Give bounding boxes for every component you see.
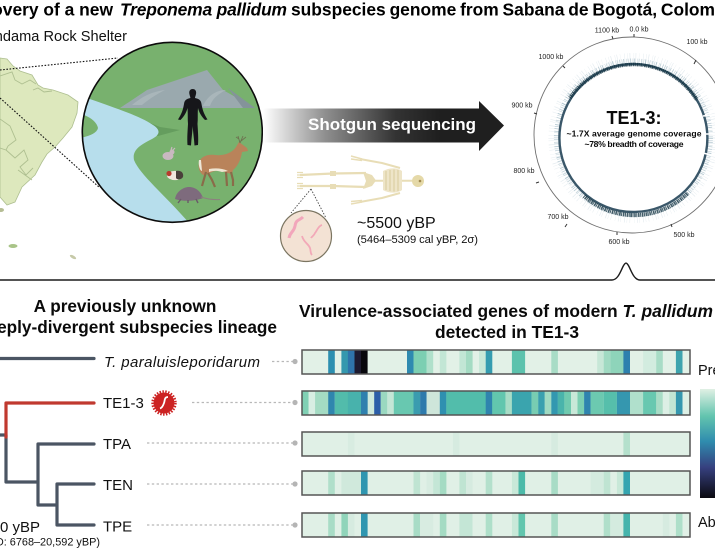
title: Treponema pallidum [120, 0, 287, 20]
heatmap row: TPE [302, 513, 690, 537]
skeleton [297, 156, 424, 204]
guinea pig [166, 171, 183, 180]
genome stats: ~78% breadth of coverage [584, 139, 684, 149]
tick labels: 100 kb [686, 39, 708, 46]
tree tip labels [103, 354, 260, 536]
river [80, 99, 190, 224]
connector dotted lines [147, 359, 298, 528]
ticks [534, 34, 696, 235]
dotted zoom lines from map to scene [0, 58, 118, 188]
date label [357, 215, 478, 246]
tree tip labels: TE1-3 [103, 395, 144, 412]
deer [199, 136, 248, 187]
heatmap row: TEN [302, 471, 690, 495]
tick labels: 800 kb [513, 168, 535, 175]
heatmap row: TPA [302, 432, 690, 456]
armadillo [175, 187, 220, 203]
tick labels: 700 kb [547, 214, 569, 221]
tick labels: 1100 kb [595, 28, 619, 34]
title [0, 0, 715, 20]
heatmap row: TE1-3 [302, 391, 690, 415]
tick labels: 900 kb [511, 102, 533, 110]
phylogeny heading: A previously unknown [34, 296, 216, 316]
scene circle [80, 42, 262, 224]
date label: ~5500 yBP [357, 215, 436, 232]
genome stats: ~1.7X average genome coverage [566, 128, 702, 138]
divergence date [0, 519, 100, 548]
mountain [120, 70, 255, 108]
phylogeny heading [0, 296, 277, 337]
tree tip labels: TEN [103, 477, 133, 494]
human silhouette [178, 89, 208, 146]
tick labels: 600 kb [608, 239, 630, 246]
tick labels: 500 kb [673, 232, 695, 239]
river bank shadow [88, 98, 180, 136]
phylogenetic tree [0, 358, 94, 525]
virulence heading: Virulence-associated genes of modern T. pallidum [299, 301, 713, 321]
tree tip labels: TPE [103, 518, 132, 536]
river islet [83, 115, 98, 138]
tick labels: 1000 kb [539, 54, 564, 61]
map of South America [0, 58, 78, 260]
icon: ancient pathogen badge [152, 392, 176, 414]
tree tip labels: TPA [103, 436, 131, 453]
date label: (5464–5309 cal yBP, 2σ) [357, 234, 478, 246]
arrow: shotgun sequencing: Shotgun sequencing [308, 115, 476, 134]
legend: presence to absence [698, 363, 715, 531]
circular genome coverage plot [511, 26, 715, 246]
virulence heading [299, 301, 713, 342]
genome stats [566, 108, 702, 149]
coverage spikes [553, 58, 713, 218]
bracket divider [0, 263, 715, 280]
virulence heading: detected in TE1-3 [435, 322, 579, 342]
arrow: shotgun sequencing [263, 101, 504, 151]
tick labels: 0.0 kb [629, 26, 649, 34]
tree tip labels: T. paraluisleporidarum [104, 354, 260, 371]
rabbit [162, 147, 175, 160]
genome stats: TE1-3: [606, 108, 662, 128]
tick labels [511, 26, 708, 246]
magnified treponema circle [280, 189, 332, 262]
heatmap row: T. paraluisleporidarum [302, 350, 690, 374]
